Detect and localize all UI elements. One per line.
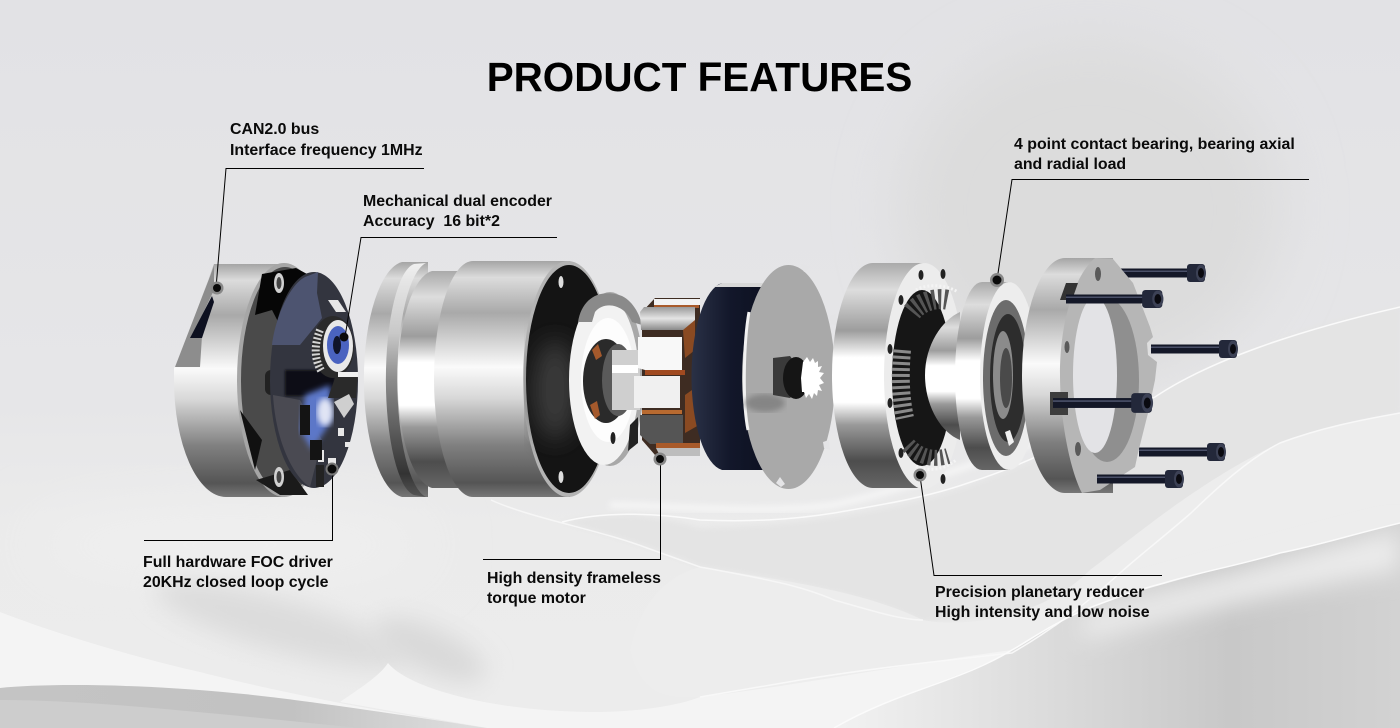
callout: FOC driver: Full hardware FOC driver: [143, 554, 333, 571]
callout: planetary reducer: Precision planetary reducer: [935, 584, 1144, 601]
planetary reducer: [832, 263, 964, 489]
callout: bearing: and radial load: [1014, 156, 1126, 173]
callout: FOC driver: 20KHz closed loop cycle: [143, 574, 329, 591]
can opening: [523, 261, 613, 497]
flange outer: [1022, 258, 1113, 493]
callout: torque motor: High density frameless: [487, 570, 661, 587]
callout: planetary reducer: High intensity and low noise: [935, 604, 1150, 621]
housing face: [237, 263, 331, 497]
housing shell: [174, 264, 285, 497]
output flange with bolts: [1022, 258, 1238, 493]
dark motor ring: [692, 283, 770, 470]
callout: dual encoder: [340, 193, 557, 342]
title: PRODUCT FEATURES: [487, 54, 912, 100]
main can: [434, 261, 570, 497]
bottom left white band: [0, 612, 487, 728]
flange: [364, 262, 428, 497]
driver housing with circuit board: [174, 263, 358, 497]
bolt holes: [1064, 267, 1101, 456]
callout: CAN bus: CAN2.0 bus: [230, 121, 319, 138]
callout: planetary reducer: [914, 468, 1162, 621]
front bolts: [1066, 290, 1163, 308]
callout: bearing: 4 point contact bearing, bearing axial: [1014, 136, 1295, 153]
callout: bearing: [990, 136, 1309, 287]
bottom left gray wedge: [0, 685, 487, 728]
encoder gear: [312, 316, 354, 378]
circuit board: [270, 272, 358, 488]
rotor plate: [569, 292, 644, 466]
spline gear: [801, 357, 824, 399]
flange shadow ring: [386, 263, 426, 497]
cross roller bearing: [955, 282, 1038, 470]
neck: [398, 271, 475, 488]
through hole: [1075, 298, 1139, 462]
callout: CAN bus: [210, 121, 424, 294]
callout: torque motor: torque motor: [487, 590, 586, 607]
callout: FOC driver: [143, 462, 338, 591]
stator: [634, 298, 700, 456]
hub: [925, 312, 960, 440]
callout: CAN bus: Interface frequency 1MHz: [230, 142, 423, 159]
wave lines: [562, 307, 1400, 522]
white fold lower center: [340, 650, 1012, 728]
gear teeth: [901, 350, 905, 418]
callout: dual encoder: Mechanical dual encoder: [363, 193, 552, 210]
notch: [175, 266, 214, 367]
back plate with spline shaft: [742, 264, 837, 489]
mounting holes: [888, 269, 946, 484]
motor housing: [364, 261, 613, 497]
callout: torque motor: [483, 452, 666, 607]
callout: dual encoder: Accuracy 16 bit*2: [363, 213, 500, 230]
bottom right gray field: [834, 523, 1400, 728]
back bolts: [1119, 264, 1206, 282]
